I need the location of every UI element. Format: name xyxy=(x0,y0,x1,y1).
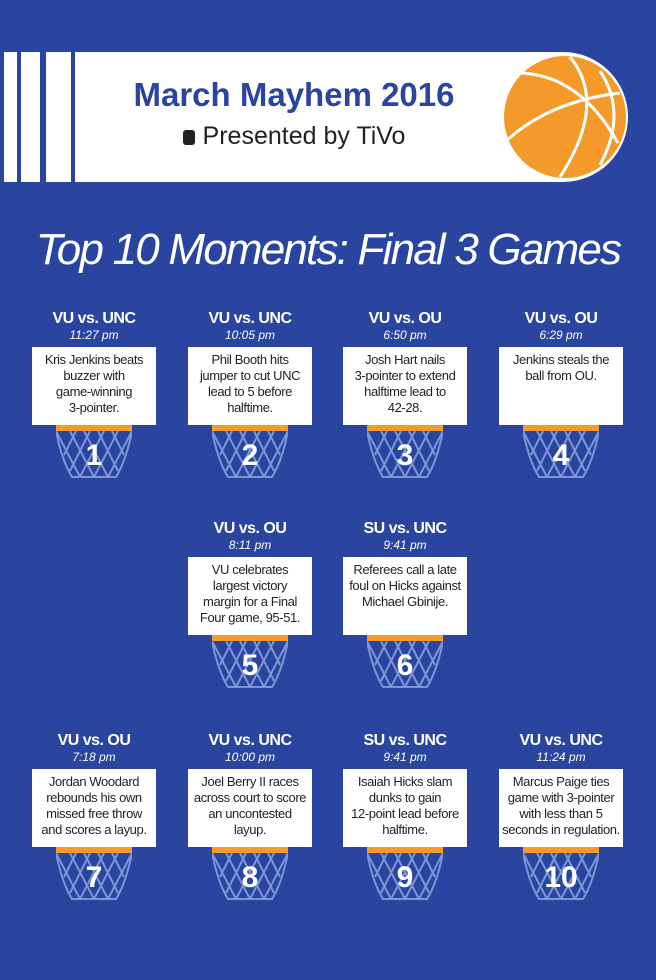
card 10: with less than 5 xyxy=(519,806,603,821)
card 2: jumper to cut UNC xyxy=(200,368,300,383)
card 2: 10:05 pm xyxy=(225,328,275,342)
card 3: halftime lead to xyxy=(364,384,446,399)
card 9: Isaiah Hicks slam xyxy=(358,774,452,789)
card 1: game-winning xyxy=(56,384,132,399)
card 7: missed free throw xyxy=(46,806,142,821)
card 3: 3-pointer to extend xyxy=(355,368,455,383)
header banner xyxy=(75,52,628,182)
card 5: 8:11 pm xyxy=(229,538,271,552)
card 10: seconds in regulation. xyxy=(502,822,620,837)
card 1: 3-pointer. xyxy=(69,400,119,415)
card 1: 1 xyxy=(86,439,102,472)
card 2: halftime. xyxy=(227,400,273,415)
card 7: rebounds his own xyxy=(46,790,142,805)
card 8: Joel Berry II races xyxy=(201,774,299,789)
card 3: Josh Hart nails xyxy=(365,352,445,367)
card 1: VU vs. UNC xyxy=(52,310,136,327)
card 8 xyxy=(188,732,312,900)
card 3: 42-28. xyxy=(388,400,422,415)
card 4: ball from OU. xyxy=(525,368,597,383)
card 10 xyxy=(499,732,623,900)
card 5: Four game, 95-51. xyxy=(200,610,300,625)
card 2: 2 xyxy=(242,439,258,472)
card 7: 7:18 pm xyxy=(72,750,116,764)
card 2: VU vs. UNC xyxy=(208,310,292,327)
card 5 xyxy=(188,520,312,688)
card 2 xyxy=(188,310,312,478)
card 8: layup. xyxy=(234,822,266,837)
card 7 xyxy=(32,732,156,900)
card 1: Kris Jenkins beats xyxy=(45,352,143,367)
card 6: 6 xyxy=(397,649,413,682)
subtitle with tivo icon: Presented by TiVo xyxy=(203,122,405,150)
card 2: Phil Booth hits xyxy=(211,352,289,367)
card 4: 4 xyxy=(553,439,569,472)
card 3 xyxy=(343,310,467,478)
card 8: VU vs. UNC xyxy=(208,732,292,749)
card 5: margin for a Final xyxy=(203,594,297,609)
card 10: Marcus Paige ties xyxy=(513,774,609,789)
card 8: 8 xyxy=(242,861,258,894)
card 7: 7 xyxy=(86,861,102,894)
card 9: dunks to gain xyxy=(369,790,441,805)
card 3: 3 xyxy=(397,439,413,472)
card 8: 10:00 pm xyxy=(225,750,275,764)
card 7: and scores a layup. xyxy=(41,822,147,837)
card 9: halftime. xyxy=(382,822,428,837)
card 2: lead to 5 before xyxy=(208,384,292,399)
card 10: 11:24 pm xyxy=(536,750,586,764)
card 5: largest victory xyxy=(213,578,287,593)
card 7: VU vs. OU xyxy=(58,732,130,749)
card 7: Jordan Woodard xyxy=(49,774,139,789)
card 6 xyxy=(343,520,467,688)
heading: top 10 moments: Top 10 Moments: Final 3 Games xyxy=(36,225,620,274)
card 1: 11:27 pm xyxy=(69,328,119,342)
card 6: Referees call a late xyxy=(353,562,457,577)
card 5: 5 xyxy=(242,649,258,682)
card 9 xyxy=(343,732,467,900)
card 5: VU celebrates xyxy=(212,562,288,577)
card 3: VU vs. OU xyxy=(369,310,441,327)
card 9: 9:41 pm xyxy=(383,750,427,764)
card 10: game with 3-pointer xyxy=(508,790,614,805)
card 8: across court to score xyxy=(194,790,306,805)
card 4: 6:29 pm xyxy=(539,328,583,342)
card 9: 9 xyxy=(397,861,413,894)
card 6: Michael Gbinije. xyxy=(362,594,448,609)
card 9: SU vs. UNC xyxy=(363,732,447,749)
header stripes xyxy=(4,52,71,182)
card 1 xyxy=(32,310,156,478)
card 6: SU vs. UNC xyxy=(363,520,447,537)
card 6: foul on Hicks against xyxy=(349,578,461,593)
card 5: VU vs. OU xyxy=(214,520,286,537)
card 1: buzzer with xyxy=(63,368,125,383)
card 10: 10 xyxy=(544,861,578,894)
card 4: VU vs. OU xyxy=(525,310,597,327)
title: March Mayhem 2016 xyxy=(134,76,454,113)
card 10: VU vs. UNC xyxy=(519,732,603,749)
card 6: 9:41 pm xyxy=(383,538,427,552)
card 8: an uncontested xyxy=(208,806,292,821)
card 4: Jenkins steals the xyxy=(513,352,609,367)
card 3: 6:50 pm xyxy=(383,328,427,342)
card 9: 12-point lead before xyxy=(351,806,459,821)
icon: basketball xyxy=(504,56,626,178)
card 4 xyxy=(499,310,623,478)
